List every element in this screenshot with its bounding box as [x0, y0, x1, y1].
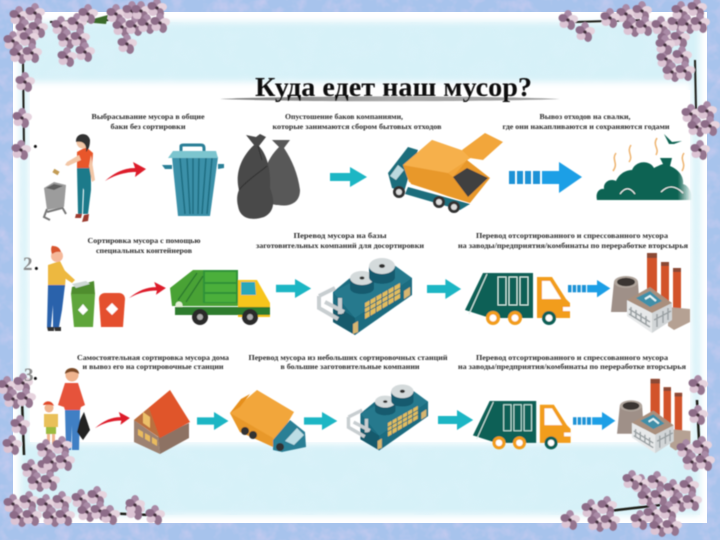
arrow: teal row 3 c [438, 410, 473, 430]
row 3 captions: Самостоятельная сортировка мусора дома [77, 353, 229, 362]
arrow: teal row 3 b [304, 412, 337, 430]
arrow: red 2 [129, 282, 166, 298]
number 2: . [34, 254, 39, 275]
row 3 captions: в большие заготовительные компании [280, 362, 420, 371]
blossom: bottom right corner [560, 375, 715, 537]
row 3 captions: и вывоз его на сортировочные станции [82, 362, 224, 371]
number 2 [23, 254, 39, 275]
row 2 captions: Перевод отсортированного и спрессованного мусора [476, 231, 668, 240]
icon: green garbage truck [170, 270, 270, 325]
icon: sorting machine small [348, 384, 428, 450]
icon: recycling factory [611, 253, 690, 333]
arrow: blue row 2 [568, 280, 610, 297]
arrow: teal row 3 a [197, 412, 228, 430]
row 1 captions: Вывоз отходов на свалки, [540, 112, 631, 121]
row 1 captions: Опустошение баков компаниями, [285, 112, 403, 121]
row 3 captions: Перевод мусора из небольших сортировочных станций [248, 353, 448, 362]
icon: sorting machine [319, 258, 412, 335]
icon: man and child with bag [43, 368, 90, 451]
arrow: blue row 3 [573, 412, 615, 430]
icon: green and orange truck small [473, 401, 571, 449]
row 2 captions: специальных контейнеров [96, 246, 192, 255]
icon: green and orange truck [465, 273, 570, 325]
row 1 captions [92, 112, 670, 131]
arrow: blue row 1 [509, 162, 582, 193]
icon: landfill [597, 134, 692, 200]
number 3 [24, 364, 38, 386]
row 3 captions: на заводы/предприятия/комбинаты по переработке вторсырья [458, 362, 686, 371]
row 2 captions: на заводы/предприятия/комбинаты по переработке вторсырья [458, 241, 688, 250]
icon: orange dump truck [388, 133, 503, 213]
blossom: bottom left corner [0, 373, 165, 527]
row 1 captions: баки без сортировки [110, 122, 186, 131]
arrow: red 3 [95, 412, 130, 428]
title: Куда едет наш мусор? [255, 72, 532, 102]
icon: black garbage bags [237, 134, 300, 219]
blossom: top left corner [4, 0, 170, 160]
row 1 captions: Выбрасывание мусора в общие [92, 112, 205, 121]
number 3: 3 [24, 365, 34, 386]
row 1 captions: где они накапливаются и сохраняются годами [502, 122, 670, 131]
icon: woman at public bin [44, 134, 95, 222]
arrow: teal row 2 left [276, 279, 311, 298]
arrow: teal row 2 right [427, 279, 461, 299]
row 3 captions [77, 353, 686, 371]
icon: orange truck right-facing [230, 390, 306, 452]
icon: teal trash can [162, 145, 224, 216]
icon: house [134, 390, 190, 454]
row 2 captions: Сортировка мусора с помощью [88, 236, 201, 245]
icon: recycling factory small [617, 379, 691, 453]
arrow: teal row 1 [330, 167, 367, 187]
blossom: top right corner [558, 0, 720, 160]
arrow: red 1 [105, 162, 146, 181]
number 2: 2 [23, 254, 32, 275]
row 3 captions: Перевод отсортированного и спрессованного мусора [476, 353, 668, 362]
row 2 captions [88, 231, 688, 255]
row 1 captions: которые занимаются сбором бытовых отходов [272, 122, 442, 131]
row 2 captions: Перевод мусора на базы [294, 231, 387, 240]
number 1: . [33, 132, 38, 153]
number 3: . [33, 364, 38, 385]
icon: woman with recycling bins [47, 246, 125, 331]
row 2 captions: заготовительных компаний для досортировки [256, 241, 425, 250]
